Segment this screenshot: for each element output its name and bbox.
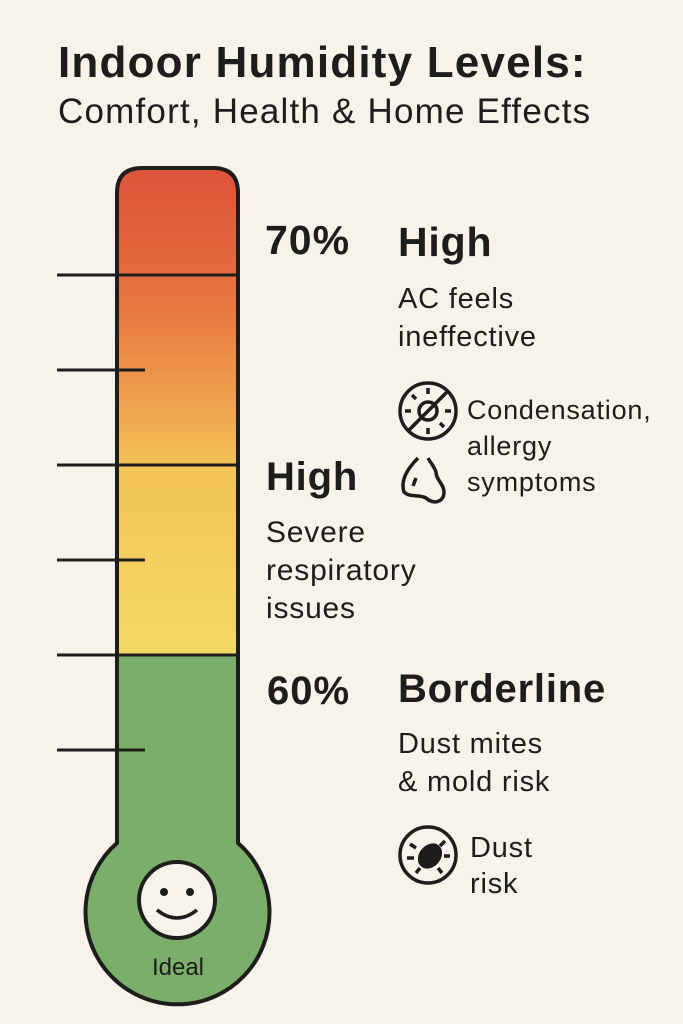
title: Indoor Humidity Levels:: [58, 38, 587, 87]
text: dust mites: & mold risk: [398, 766, 550, 798]
text: AC feels ineffective: AC feels: [398, 283, 514, 315]
ideal label: Ideal: [152, 954, 204, 981]
text: condensation: symptoms: [467, 467, 596, 497]
text: dust risk: Dust: [470, 832, 533, 864]
label: 60% Borderline: 60%: [267, 669, 350, 713]
text: dust risk: risk: [470, 868, 518, 900]
icon: smiley: [139, 862, 215, 938]
text: condensation: allergy: [467, 431, 552, 461]
text: dust mites: [398, 728, 550, 798]
text: condensation: Condensation,: [467, 395, 652, 425]
subtitle: Comfort, Health & Home Effects: [58, 92, 591, 131]
text: AC feels ineffective: [398, 283, 537, 353]
icon: bug: [400, 827, 456, 883]
text: dust mites: Dust mites: [398, 728, 543, 760]
text: dust risk: [470, 832, 533, 900]
text: severe respiratory: issues: [266, 592, 356, 625]
icon: nose: [403, 458, 444, 502]
text: High: [398, 219, 492, 265]
text: severe respiratory: [266, 516, 417, 625]
text: Borderline: [398, 667, 606, 711]
icon: no germ: [400, 383, 456, 439]
text: AC feels ineffective: ineffective: [398, 321, 537, 353]
label: High middle: High: [266, 455, 358, 499]
text: severe respiratory: Severe: [266, 516, 366, 549]
text: condensation: [467, 395, 652, 497]
label: 70% High: 70%: [265, 217, 350, 263]
text: severe respiratory: respiratory: [266, 554, 417, 587]
